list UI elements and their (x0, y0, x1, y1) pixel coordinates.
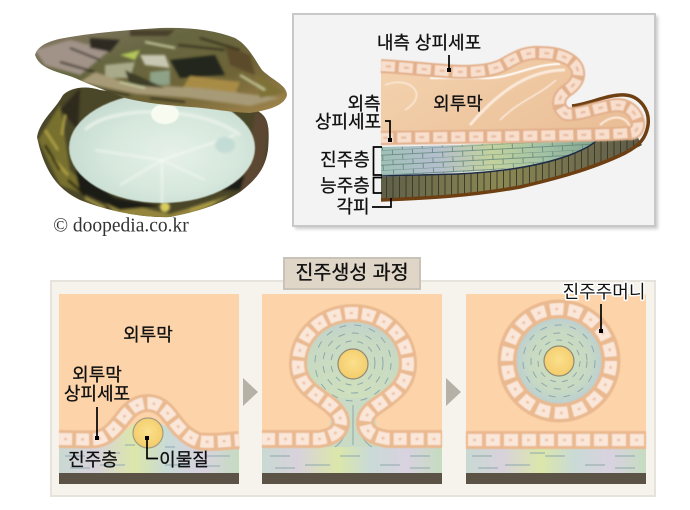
foreign body (133, 418, 163, 448)
flat cell row (466, 431, 646, 449)
label: mantle epithelium: 상피세포 (64, 384, 130, 404)
nacre band (466, 447, 646, 484)
mantle tissue (381, 49, 642, 145)
foreign body (338, 349, 368, 379)
label: outer epithelium: 외측 (347, 94, 381, 114)
process background (51, 281, 655, 496)
prismatic layer (381, 134, 643, 200)
lower shell (37, 88, 269, 218)
periostracum (381, 95, 648, 200)
copyright text: © doopedia.co.kr (53, 216, 189, 236)
label: inner epithelium: 내측 상피세포 (377, 33, 481, 53)
label: mantle: 외투막 (123, 325, 173, 345)
label: outer epithelium: 상피세포 (315, 112, 381, 132)
label: nacre layer: 진주층 (68, 450, 118, 470)
label: foreign body (145, 436, 209, 470)
label: pearl sac: 진주주머니 (563, 282, 645, 302)
cell layer (59, 403, 239, 442)
heading (284, 258, 420, 289)
panel background (293, 14, 658, 229)
nacre layer (381, 140, 595, 175)
cell layer (262, 313, 442, 439)
panel: mantle cross-section (293, 14, 658, 229)
epithelial cells (381, 53, 638, 138)
arrow 2 (446, 378, 461, 406)
arrow 1 (243, 378, 258, 406)
illustration: opened pearl oyster (30, 25, 290, 220)
label: outer epithelium (315, 94, 392, 142)
step 1 (59, 294, 239, 484)
label: pearl sac (563, 282, 645, 333)
label: prismatic layer: 능주층 (320, 176, 370, 196)
panel: pearl formation process (51, 258, 655, 496)
nacre band (59, 420, 239, 484)
label: mantle epithelium (64, 365, 130, 440)
label: mantle: 외투막 (433, 94, 483, 114)
label: periostracum: 각피 (336, 197, 370, 217)
upper shell (30, 25, 290, 117)
nacre and sac (262, 313, 442, 484)
step 3 (466, 282, 646, 484)
dark boundary line (381, 140, 597, 176)
pearl (151, 104, 179, 124)
nacre interior (69, 93, 255, 203)
label: mantle epithelium: 외투막 (72, 365, 122, 385)
heading: 진주생성 과정 (295, 262, 409, 284)
label: periostracum (336, 197, 391, 217)
label: nacre layer (320, 147, 382, 175)
pearl sac (507, 309, 611, 413)
label: foreign body: 이물질 (159, 450, 209, 470)
label: nacre layer: 진주층 (320, 150, 370, 170)
label: inner epithelium (377, 33, 481, 72)
step 2 (262, 294, 442, 484)
foreign body (544, 346, 574, 376)
